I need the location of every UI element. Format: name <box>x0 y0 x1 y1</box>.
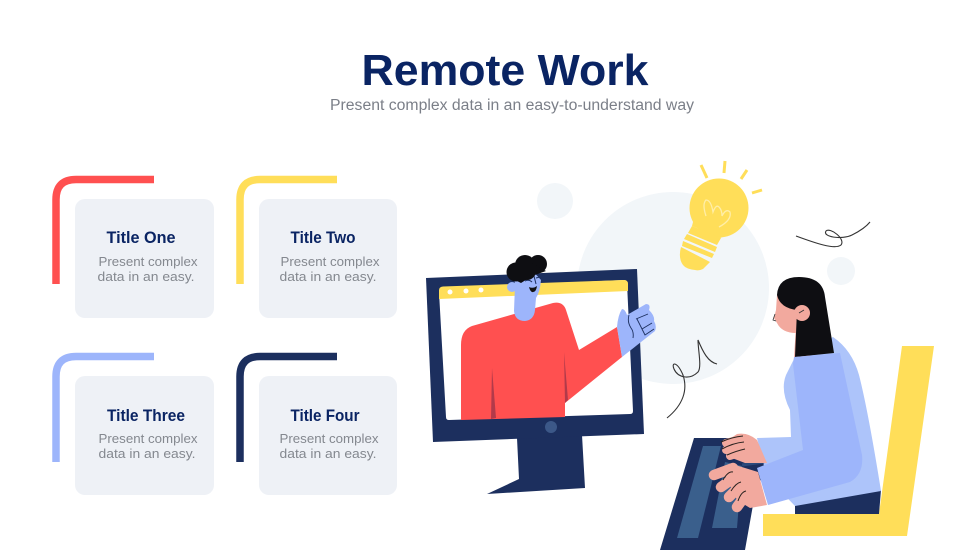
monitor <box>426 269 644 494</box>
panel: title two: Title Two <box>290 229 356 247</box>
gap between hands <box>742 462 764 465</box>
finger lines <box>721 436 746 501</box>
panel: title one: data in an easy. <box>98 269 194 284</box>
neck <box>794 325 810 358</box>
panel: title two: Present complex <box>280 254 380 269</box>
face <box>774 295 802 333</box>
lower hand <box>714 464 767 508</box>
man on screen <box>461 255 656 420</box>
pants <box>795 490 881 514</box>
waving hand <box>617 304 656 357</box>
panel: title two <box>240 180 397 318</box>
panel: title three: Title Three <box>107 407 185 425</box>
panel: title three <box>56 356 214 495</box>
red sweater <box>461 303 622 420</box>
monitor button <box>545 421 557 433</box>
panel: title four <box>240 356 397 495</box>
panel: title two: data in an easy. <box>280 269 376 284</box>
monitor screen <box>439 280 633 420</box>
title: Remote Work <box>362 46 649 95</box>
monitor frame <box>426 269 644 442</box>
panel: title one <box>56 180 214 318</box>
panel: title four: Present complex <box>280 431 379 446</box>
hair <box>777 277 834 357</box>
squiggle: bottom centre <box>667 340 717 418</box>
ear <box>794 305 810 321</box>
hair <box>506 255 547 283</box>
panel: title one: Present complex <box>98 254 198 269</box>
mouth and eyes <box>529 286 537 292</box>
laptop <box>660 438 765 550</box>
chair <box>763 346 934 536</box>
background circles <box>537 183 855 384</box>
panel: title three: data in an easy. <box>98 446 196 461</box>
panel: title three: Present complex <box>98 431 198 446</box>
squiggle: top right <box>796 222 870 247</box>
browser bar <box>439 280 628 299</box>
subtitle: Present complex data in an easy-to-understand way <box>330 97 694 114</box>
panel: title one: Title One <box>106 229 176 247</box>
icon: light bulb <box>680 161 762 270</box>
front sweater <box>757 353 862 505</box>
neck and face <box>514 268 541 321</box>
upper hand <box>726 434 767 463</box>
panel: title four: data in an easy. <box>280 446 376 461</box>
panel: title four: Title Four <box>290 407 360 425</box>
monitor stand <box>487 435 585 494</box>
light sweater <box>757 337 881 506</box>
woman <box>714 277 881 514</box>
